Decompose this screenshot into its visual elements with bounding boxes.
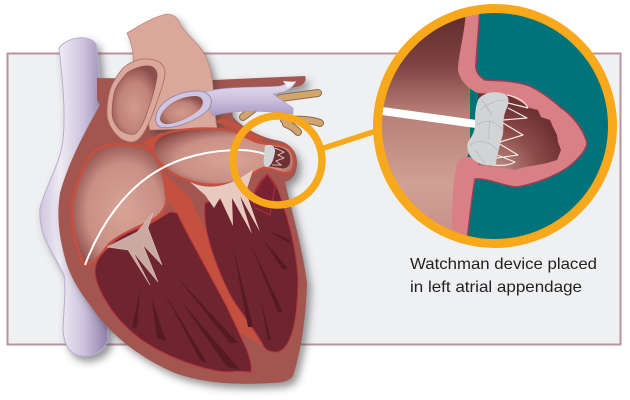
appendage cavity [266,146,290,168]
left ventricle trabeculae [233,230,290,340]
small device [264,145,284,167]
guidewire in heart [85,150,265,265]
teal exterior [467,13,608,239]
mitral valve [190,170,260,234]
right atrium [72,144,167,265]
watchman fabric cap [467,92,508,165]
nitinol struts [492,95,528,165]
left ventricle [205,174,298,352]
zoomed detail circle [370,0,630,245]
heart body [58,76,307,384]
aorta ring [107,59,165,142]
caption [410,256,597,296]
right ventricle [95,212,251,372]
caption: Watchman device placed [410,256,597,273]
left atrium and appendage [153,128,294,185]
aorta [127,14,217,130]
right ventricle trabeculae [132,277,240,370]
appendage wall [452,5,587,240]
superior and inferior vena cava [40,38,108,356]
appendage wall outer edge [467,5,587,240]
septum and central walls [143,132,262,345]
heart [58,14,320,384]
tricuspid valve [107,213,162,285]
atrium background [382,17,470,230]
appendage cavity [478,93,561,170]
background panel [8,54,620,344]
tan pulmonary veins [243,93,320,132]
small magnifier ring and connector [233,116,376,205]
orange ring [378,8,612,244]
wire [375,110,476,124]
pulmonary vein tube [156,81,296,128]
caption: in left atrial appendage [410,279,582,296]
lower wall of vein junction [215,118,262,143]
